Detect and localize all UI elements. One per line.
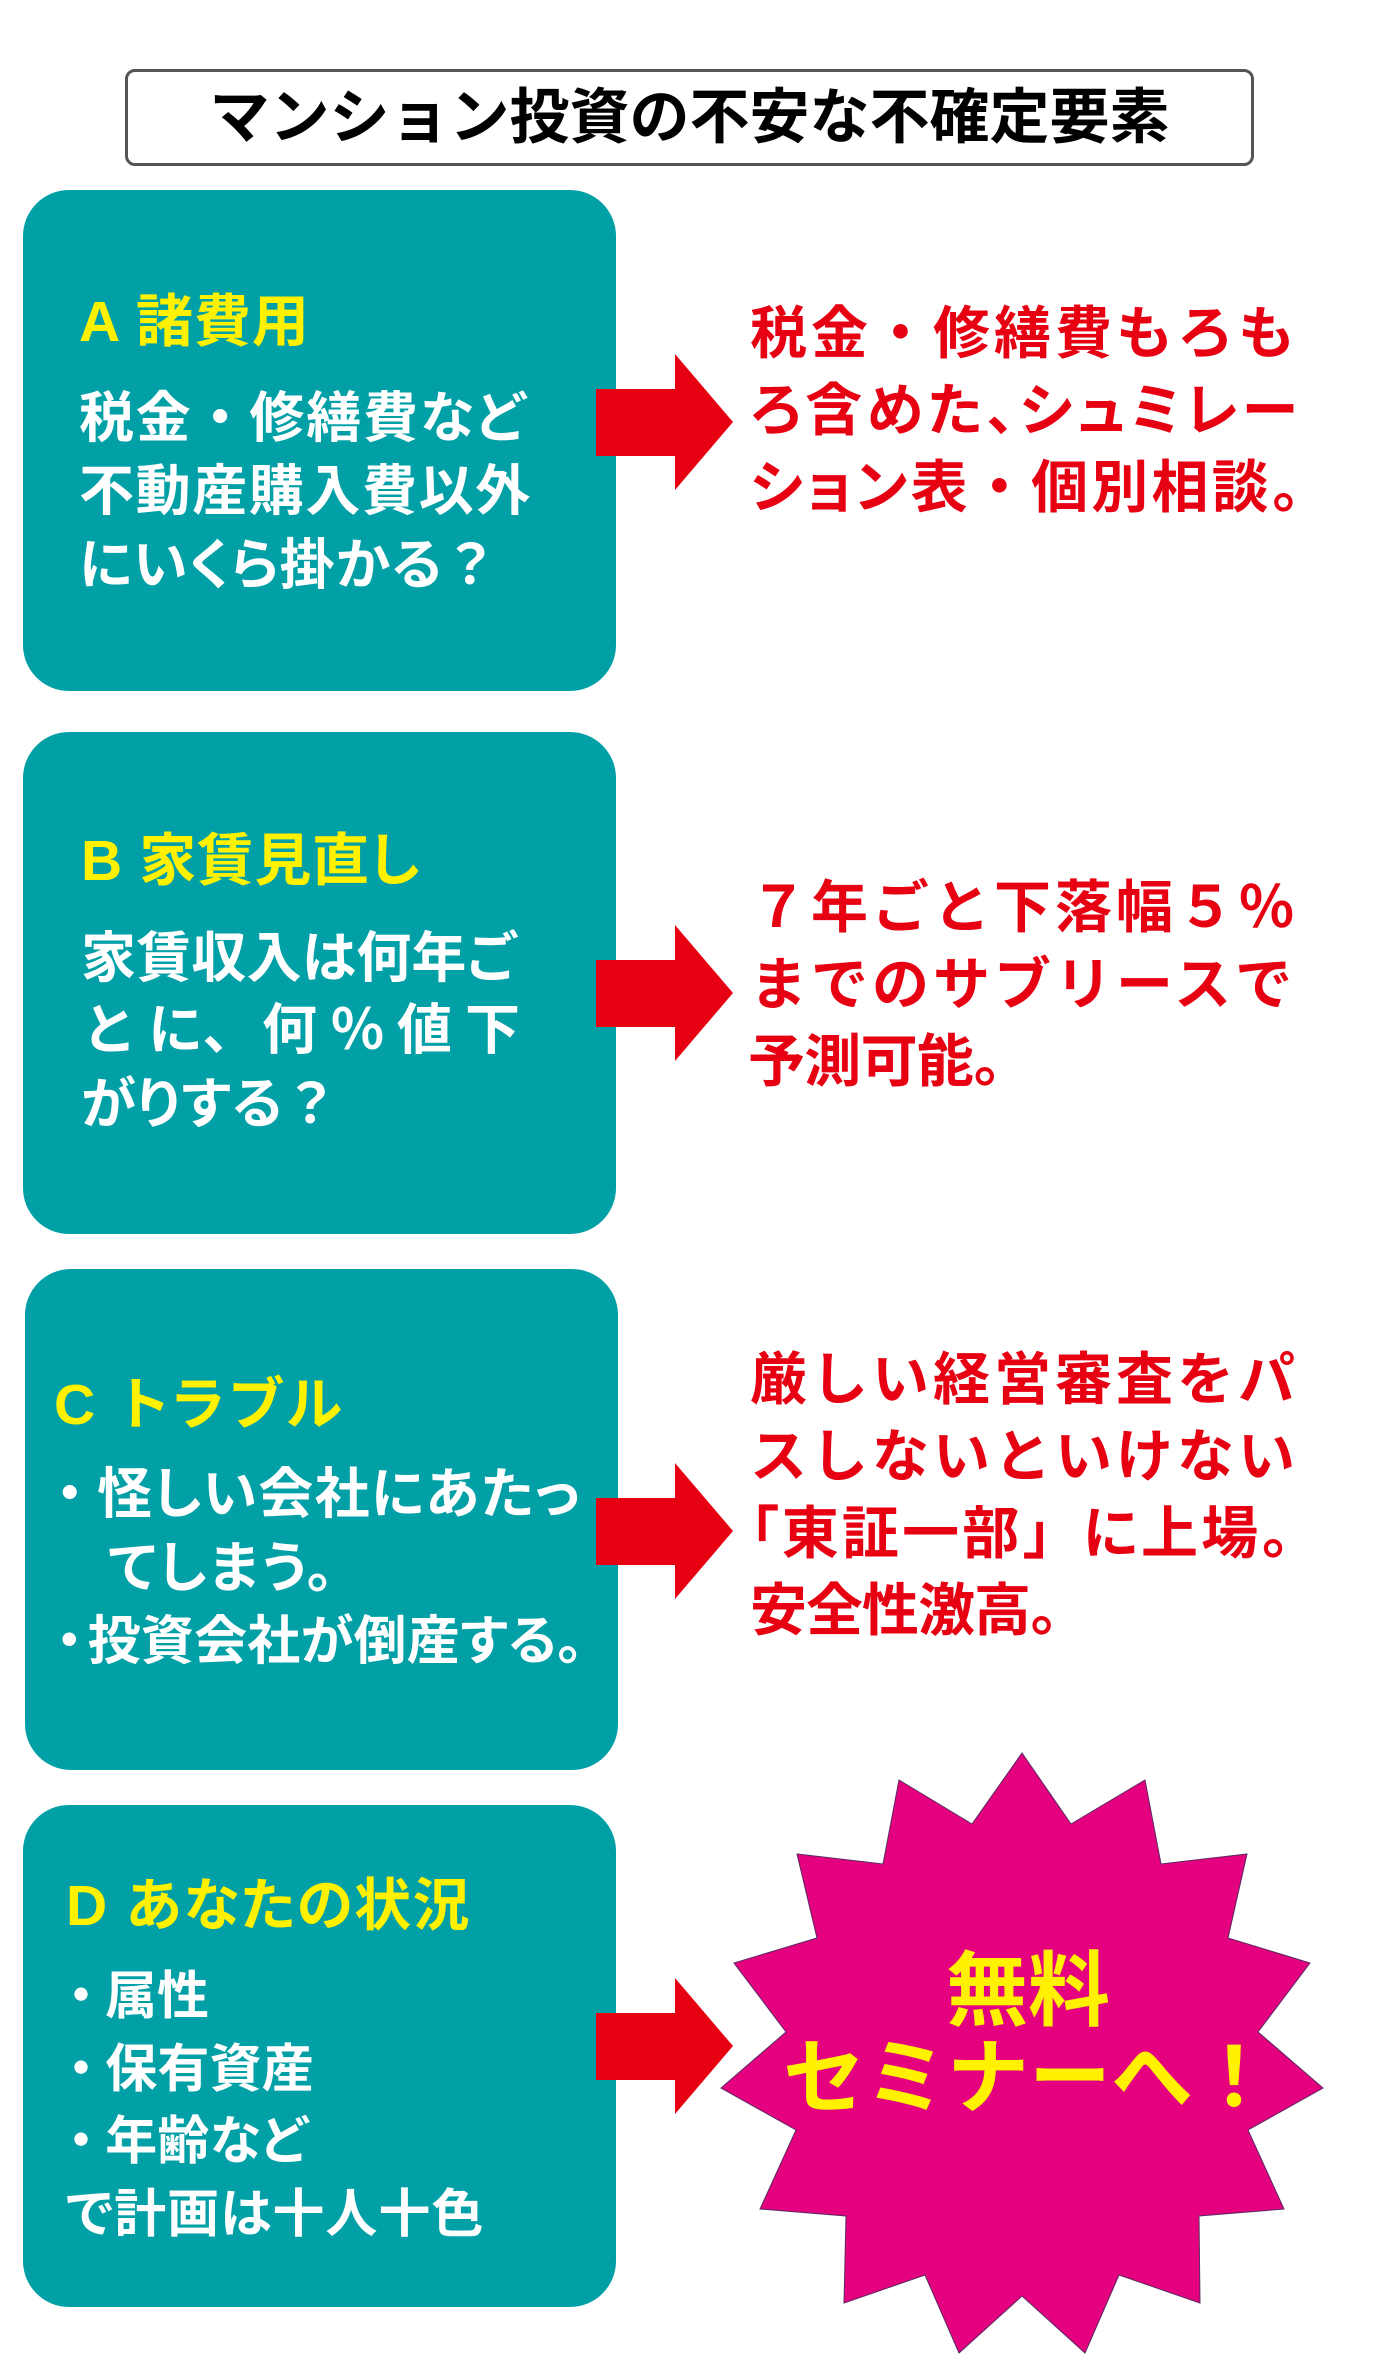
text: C answer: 安全性激高。 <box>750 1579 1058 1643</box>
arrow B <box>596 925 733 1061</box>
text: B answer: 予測可能。 <box>748 1030 1001 1094</box>
text: A answer: ろ含めた、シュミレー <box>750 379 1302 443</box>
title box <box>125 69 1254 166</box>
panel: C card <box>25 1269 618 1770</box>
text: A answer: ション表・個別相談。 <box>750 456 1304 520</box>
text: B question: に、 <box>148 999 258 1061</box>
text: B question: 値 <box>397 999 453 1061</box>
heading: A: A 諸費用 <box>79 290 310 354</box>
callout text: 無料 <box>946 1946 1110 2037</box>
title text: マンション投資の不安な不確定要素 <box>210 84 1170 151</box>
callout text <box>783 1946 1275 2124</box>
text: D question: ・保有資産 <box>68 2041 314 2099</box>
text: B question: と <box>85 999 132 1061</box>
text: D question: ・属性 <box>68 1968 209 2026</box>
callout text: セミナーへ！ <box>783 2033 1275 2124</box>
text: B question: ％ <box>330 999 386 1061</box>
heading: B: B 家賃見直し <box>81 829 420 893</box>
text: B question: がりする？ <box>81 1073 339 1135</box>
text: B question: 何 <box>262 999 318 1061</box>
text: B answer <box>748 876 1299 1094</box>
text: A question: 税金・修繕費など <box>79 387 526 449</box>
text: D question: で計画は十人十色 <box>66 2186 484 2244</box>
text: C question: ・投資会社が倒産する。 <box>56 1612 584 1671</box>
text: B question <box>81 927 521 1135</box>
heading: C: C トラブル <box>54 1373 347 1437</box>
text: A question: 不動産購入費以外 <box>79 460 532 522</box>
panel: A card <box>23 190 616 691</box>
text: B answer: までのサブリースで <box>750 953 1296 1017</box>
text: D question <box>66 1968 484 2244</box>
arrow A <box>596 354 733 490</box>
text: A question <box>79 387 532 596</box>
text: C question <box>56 1463 584 1671</box>
text: C question: ・怪しい会社にあたっ <box>56 1463 581 1525</box>
arrow D <box>596 1978 733 2114</box>
text: B question: 家賃収入は何年ご <box>81 927 515 989</box>
text: A answer: 税金・修繕費もろも <box>750 302 1299 366</box>
text: C answer: 厳しい経営審査をパ <box>750 1348 1299 1412</box>
panel: B card <box>23 732 616 1234</box>
heading: D: D あなたの状況 <box>66 1874 471 1938</box>
text: C answer <box>750 1348 1299 1643</box>
text: A question: にいくら掛かる？ <box>79 534 499 596</box>
panel: D card <box>23 1805 616 2307</box>
text: C answer: スしないといけない <box>750 1425 1299 1489</box>
text: C answer: 「東証一部」に上場。 <box>750 1502 1293 1566</box>
text: C question: てしまう。 <box>108 1537 336 1599</box>
text: D question: ・年齢など <box>68 2113 307 2171</box>
arrow C <box>596 1463 733 1599</box>
text: B answer: ７年ごと下落幅５％ <box>750 876 1299 940</box>
text: B question: 下 <box>465 999 521 1061</box>
text: A answer <box>750 302 1304 520</box>
